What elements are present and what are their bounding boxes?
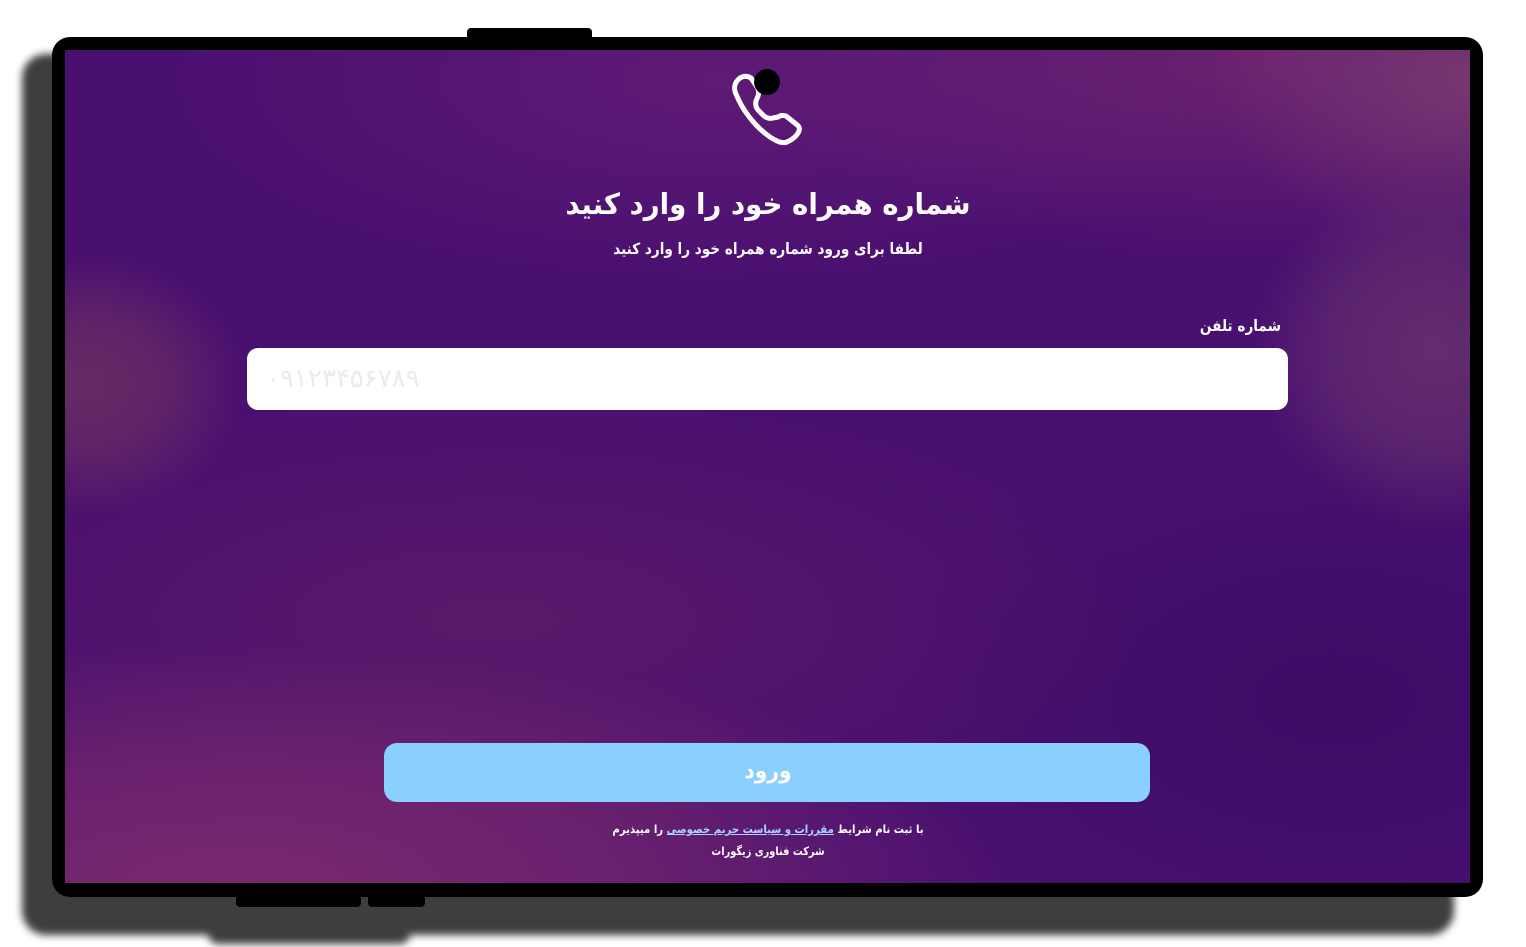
company line: شرکت فناوری زیگورات bbox=[711, 844, 825, 858]
button label: ورود bbox=[744, 759, 792, 784]
subtitle: لطفا برای ورود شماره همراه خود را وارد کنید bbox=[613, 240, 923, 258]
camera dot bbox=[754, 69, 780, 95]
device bottom button left bbox=[236, 890, 361, 907]
device bottom button right bbox=[368, 890, 425, 907]
field label: شماره تلفن bbox=[1200, 317, 1281, 335]
input placeholder: ۰۹۱۲۳۴۵۶۷۸۹ bbox=[266, 364, 420, 394]
title: شماره همراه خود را وارد کنید bbox=[565, 187, 971, 221]
icon: phone bbox=[732, 74, 802, 146]
device top button bbox=[467, 28, 592, 42]
phone input bbox=[247, 348, 1288, 410]
terms line: با ثبت نام شرایط مقررات و سیاست حریم خصوصی را میپذیرم bbox=[612, 822, 924, 836]
login button bbox=[384, 743, 1150, 802]
